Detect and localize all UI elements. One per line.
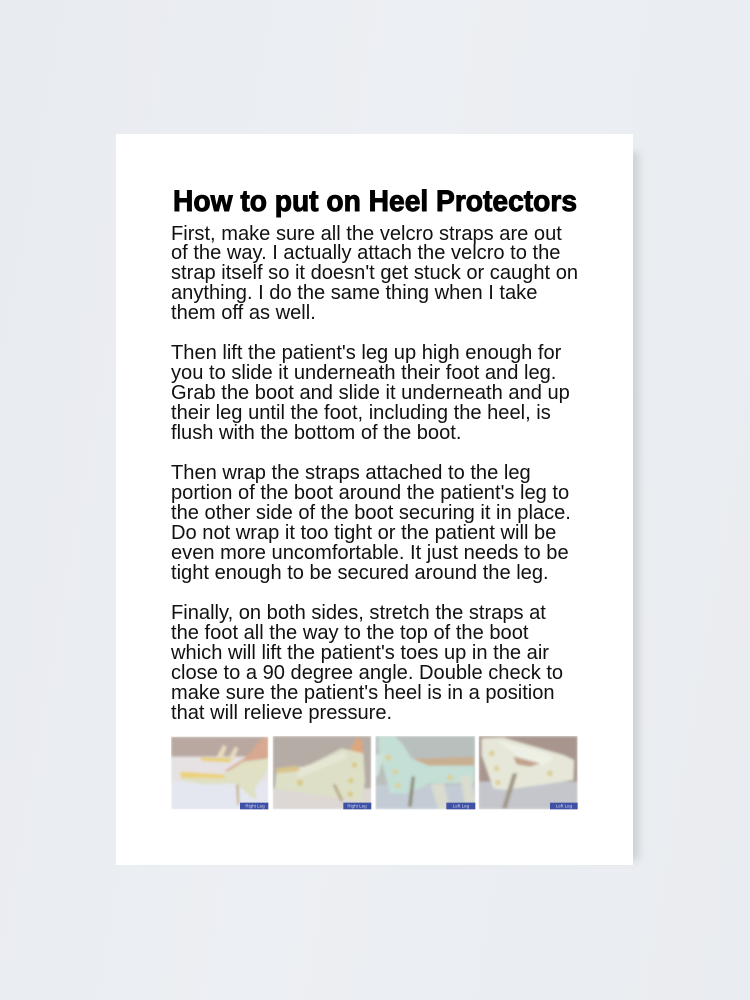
photo captions: Left Leg xyxy=(453,804,470,808)
text block: instructions: Then wrap the straps attached to the leg xyxy=(171,462,531,484)
text block: instructions: them off as well. xyxy=(171,302,316,324)
text block: instructions xyxy=(171,222,578,724)
text block: instructions: of the way. I actually attach the velcro to the xyxy=(171,242,560,264)
text block: instructions: strap itself so it doesn't get stuck or caught on xyxy=(171,262,578,284)
photo: left leg outer view xyxy=(479,736,578,809)
text block: instructions: anything. I do the same thing when I take xyxy=(171,282,537,304)
photo: right leg boot raised xyxy=(273,736,371,809)
text block: instructions: even more uncomfortable. It just needs to be xyxy=(171,542,569,564)
text block: instructions: portion of the boot around the patient's leg to xyxy=(171,482,569,504)
text block: instructions: you to slide it underneath their foot and leg. xyxy=(171,362,556,384)
text block: instructions: tight enough to be secured around the leg. xyxy=(171,562,549,584)
text block: instructions: Finally, on both sides, stretch the straps at xyxy=(171,602,546,624)
panel: poster xyxy=(116,134,633,865)
photo captions: Right Leg xyxy=(347,804,367,808)
text block: instructions: the foot all the way to the top of the boot xyxy=(171,622,528,644)
text block: instructions: First, make sure all the velcro straps are out xyxy=(171,222,562,244)
text block: instructions: the other side of the boot securing it in place. xyxy=(171,502,571,524)
photo: left leg inner view xyxy=(375,736,475,809)
text block: instructions: that will relieve pressure. xyxy=(171,702,392,724)
photo strip: four heel protector photos xyxy=(171,736,578,810)
photo captions: Left Leg xyxy=(556,804,573,808)
text block: instructions: flush with the bottom of the boot. xyxy=(171,422,461,444)
text block: instructions: Grab the boot and slide it underneath and up xyxy=(171,382,570,404)
text block: instructions: close to a 90 degree angle. Double check to xyxy=(171,662,563,684)
photo: right leg side view xyxy=(171,737,268,809)
text block: instructions: Then lift the patient's leg up high enough for xyxy=(171,342,561,364)
text block: instructions: make sure the patient's heel is in a position xyxy=(171,682,555,704)
photo captions xyxy=(245,804,573,808)
photo captions: Right Leg xyxy=(245,804,265,808)
text block: instructions: their leg until the foot, including the heel, is xyxy=(171,402,551,424)
text block: instructions: which will lift the patient's toes up in the air xyxy=(171,642,549,664)
text block: instructions: Do not wrap it too tight or the patient will be xyxy=(171,522,556,544)
